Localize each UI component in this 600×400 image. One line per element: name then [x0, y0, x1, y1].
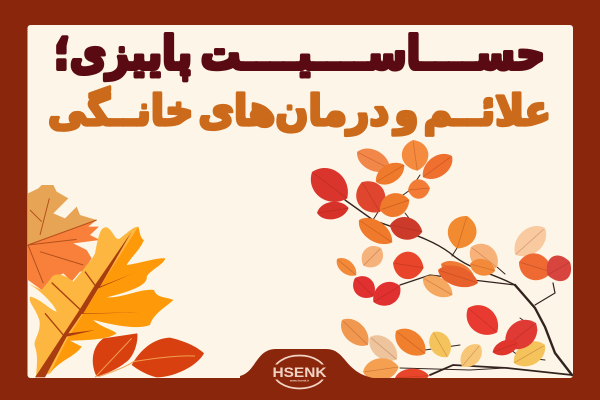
bottom frame strip — [0, 378, 600, 400]
tan maple leaf — [28, 185, 97, 245]
middle leaves — [333, 241, 577, 312]
lower leaves — [335, 298, 551, 386]
yellow oak leaf light half — [28, 227, 138, 377]
logo url: www.hsenk.ir — [289, 378, 310, 382]
orange maple leaf — [28, 220, 100, 290]
red leaf one — [93, 333, 137, 377]
logo mask — [268, 364, 331, 380]
autumn branch with leaves on the right — [303, 138, 577, 386]
oak leaf veins — [35, 232, 140, 377]
logo ellipse — [274, 356, 326, 388]
branches — [345, 175, 572, 375]
red leaf midribs — [95, 338, 195, 377]
logo badge tab — [240, 349, 373, 380]
autumn leaves in bottom-left corner — [28, 185, 204, 377]
logo wordmark: HSENK — [272, 364, 326, 380]
upper leaves — [303, 138, 553, 277]
HSENK logo — [268, 356, 331, 388]
maple veins — [28, 198, 97, 283]
red leaf two — [132, 338, 204, 377]
title line 2: علائــم و درمان‌های خانــگی — [48, 86, 551, 136]
yellow oak leaf dark half — [50, 227, 173, 373]
